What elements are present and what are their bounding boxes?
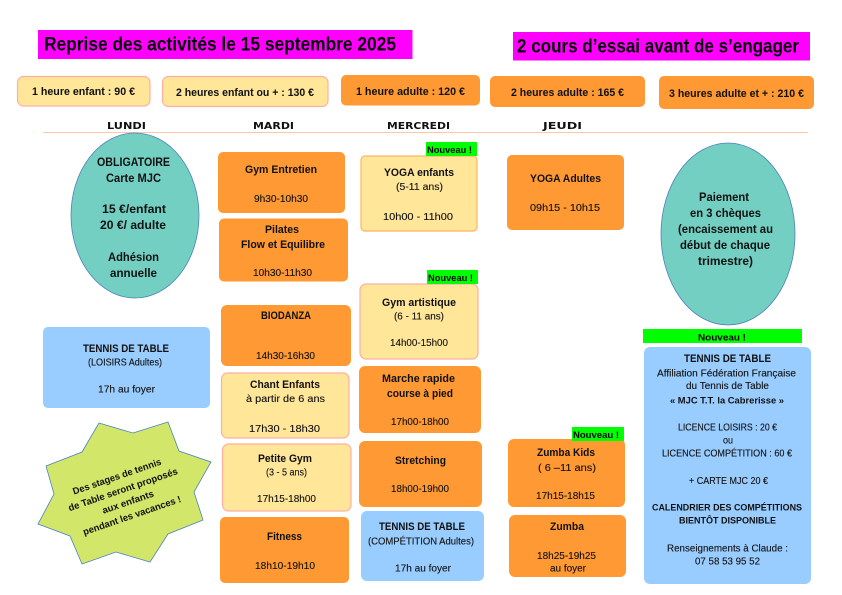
callout: star stages de tennis xyxy=(38,422,211,564)
card: Zumba Kids: Zumba Kids xyxy=(537,447,595,459)
title: reprise: Reprise des activités le 15 septembre 2025 xyxy=(44,34,396,56)
panel: carte MJC ellipse xyxy=(71,133,199,298)
card: Biodanza: 14h30-16h30 xyxy=(256,350,315,362)
panel: carte MJC ellipse: Carte MJC xyxy=(106,173,161,185)
card: Gym artistique: (6 - 11 ans) xyxy=(394,310,444,322)
price: 2 heures adulte: 2 heures adulte : 165 € xyxy=(511,87,624,99)
card: Yoga enfants: YOGA enfants xyxy=(384,167,454,179)
price: 1 heure adulte: 1 heure adulte : 120 € xyxy=(356,86,465,98)
card: Stretching xyxy=(359,441,482,507)
card: Yoga Adultes xyxy=(507,155,624,230)
card: Gym artistique: Gym artistique xyxy=(382,297,456,309)
price: 1 heure enfant xyxy=(18,76,150,106)
panel: tennis de table loisirs: (LOISIRS Adultes) xyxy=(88,356,162,368)
panel: carte MJC ellipse: OBLIGATOIRE xyxy=(97,157,170,169)
card: Biodanza: BIODANZA xyxy=(261,310,311,322)
card: Zumba Kids: 17h15-18h15 xyxy=(536,490,595,502)
panel: paiement ellipse: Paiement xyxy=(699,192,749,204)
card: Zumba Kids: ( 6 –11 ans) xyxy=(538,462,596,474)
card: Biodanza xyxy=(221,305,351,366)
card: Pilates xyxy=(219,218,348,282)
card: Yoga Adultes: YOGA Adultes xyxy=(530,173,601,185)
title: cours d'essai: 2 cours d’essai avant de s’engager xyxy=(517,36,799,58)
card: Gym artistique: 14h00-15h00 xyxy=(390,337,448,349)
card: Petite Gym xyxy=(222,444,351,511)
card: Chant Enfants: 17h30 - 18h30 xyxy=(249,423,320,435)
price: 3 heures adulte: 3 heures adulte et + : 210 € xyxy=(669,88,804,100)
card: Gym Entretien: Gym Entretien xyxy=(245,164,317,176)
card: Marche rapide: course à pied xyxy=(387,388,453,400)
callout: star stages de tennis: aux enfants xyxy=(101,489,156,517)
panel: tennis de table affiliation: Affiliation Fédération Française xyxy=(657,368,796,380)
price: 2 heures enfant xyxy=(162,76,328,106)
card: Tennis de table competition: TENNIS DE TABLE xyxy=(379,521,465,533)
price: 2 heures enfant: 2 heures enfant ou + : 130 € xyxy=(176,87,314,99)
day headers: LUNDI xyxy=(107,121,146,132)
day headers: MERCREDI xyxy=(387,121,450,132)
card: Pilates: 10h30-11h30 xyxy=(253,267,312,279)
card: Yoga enfants: 10h00 - 11h00 xyxy=(383,211,453,223)
card: Stretching: 18h00-19h00 xyxy=(391,483,449,495)
badge: nouveau tennis: Nouveau ! xyxy=(698,332,746,344)
card: Gym Entretien: 9h30-10h30 xyxy=(254,193,308,205)
day headers: JEUDI xyxy=(542,121,582,132)
badge: nouveau zumba kids: Nouveau ! xyxy=(573,430,619,441)
panel: tennis de table affiliation: TENNIS DE TABLE xyxy=(684,353,771,365)
card: Chant Enfants: Chant Enfants xyxy=(250,379,320,391)
card: Zumba: au foyer xyxy=(550,562,586,574)
panel: tennis de table affiliation: du Tennis de Table xyxy=(686,380,769,392)
card: Marche rapide xyxy=(359,366,481,433)
panel: paiement ellipse: (encaissement au xyxy=(678,224,773,236)
panel: tennis de table loisirs xyxy=(43,327,210,408)
price: 1 heure enfant: 1 heure enfant : 90 € xyxy=(32,86,135,98)
price: 2 heures adulte xyxy=(490,76,645,107)
panel: paiement ellipse xyxy=(661,143,795,325)
panel: tennis de table loisirs: 17h au foyer xyxy=(98,384,155,396)
panel: tennis de table affiliation: 07 58 53 95 52 xyxy=(695,556,760,568)
card: Zumba Kids xyxy=(508,439,625,507)
panel: paiement ellipse: début de chaque xyxy=(680,240,770,252)
panel: tennis de table affiliation: CALENDRIER DES COMPÉTITIONS xyxy=(652,502,802,514)
card: Tennis de table competition: 17h au foyer xyxy=(395,562,451,574)
panel: tennis de table affiliation: Renseignements à Claude : xyxy=(667,542,788,554)
card: Fitness: 18h10-19h10 xyxy=(255,560,315,572)
panel: tennis de table affiliation: ou xyxy=(723,434,733,446)
card: Pilates: Pilates xyxy=(265,224,299,236)
price: 1 heure adulte xyxy=(341,75,480,106)
badge: nouveau gym artistique: Nouveau ! xyxy=(428,273,473,284)
card: Stretching: Stretching xyxy=(395,455,446,467)
card: Pilates: Flow et Equilibre xyxy=(241,239,325,251)
card: Tennis de table competition: (COMPÉTITION Adultes) xyxy=(368,534,474,548)
card: Zumba xyxy=(509,515,626,577)
badge: nouveau zumba kids xyxy=(572,427,624,441)
panel: tennis de table affiliation: + CARTE MJC 20 € xyxy=(689,475,768,487)
card: Gym Entretien xyxy=(218,152,345,213)
card: Marche rapide: Marche rapide xyxy=(382,373,455,385)
panel: tennis de table affiliation xyxy=(644,347,811,584)
card: Fitness xyxy=(220,517,349,583)
card: Petite Gym: Petite Gym xyxy=(258,453,312,465)
card: Fitness: Fitness xyxy=(267,531,302,543)
panel: tennis de table affiliation: LICENCE LOISIRS : 20 € xyxy=(678,422,777,434)
callout: star stages de tennis: de Table seront proposés xyxy=(67,466,179,514)
panel: tennis de table affiliation: LICENCE COMPÉTITION : 60 € xyxy=(662,446,792,460)
day headers xyxy=(107,121,582,132)
card: Gym artistique xyxy=(360,284,478,359)
card: Chant Enfants xyxy=(222,373,349,438)
card: Yoga enfants xyxy=(361,156,477,231)
panel: tennis de table affiliation: BIENTÔT DISPONIBLE xyxy=(679,514,776,526)
panel: carte MJC ellipse: 20 €/ adulte xyxy=(100,220,166,232)
panel: tennis de table loisirs: TENNIS DE TABLE xyxy=(83,343,169,355)
panel: paiement ellipse: en 3 chèques xyxy=(690,208,761,220)
day headers: MARDI xyxy=(253,121,294,132)
panel: carte MJC ellipse: annuelle xyxy=(110,268,157,280)
callout: star stages de tennis: Des stages de tennis xyxy=(71,457,163,497)
card: Zumba: Zumba xyxy=(550,521,585,533)
panel: carte MJC ellipse: Adhésion xyxy=(108,252,159,264)
card: Yoga enfants: (5-11 ans) xyxy=(396,181,443,193)
badge: nouveau tennis xyxy=(643,329,802,344)
price: 3 heures adulte xyxy=(659,76,814,109)
card: Petite Gym: 17h15-18h00 xyxy=(257,493,316,505)
card: Chant Enfants: à partir de 6 ans xyxy=(246,393,325,405)
callout: star stages de tennis: pendant les vacances ! xyxy=(82,494,183,538)
card: Petite Gym: (3 - 5 ans) xyxy=(266,466,307,478)
badge: nouveau yoga: Nouveau ! xyxy=(427,145,472,156)
panel: carte MJC ellipse: 15 €/enfant xyxy=(102,204,166,216)
card: Marche rapide: 17h00-18h00 xyxy=(391,416,449,428)
panel: tennis de table affiliation: « MJC T.T. la Cabrerisse » xyxy=(670,396,784,406)
card: Zumba: 18h25-19h25 xyxy=(537,550,596,562)
panel: paiement ellipse: trimestre) xyxy=(698,256,753,268)
card: Tennis de table competition xyxy=(361,511,484,581)
card: Yoga Adultes: 09h15 - 10h15 xyxy=(530,202,600,214)
